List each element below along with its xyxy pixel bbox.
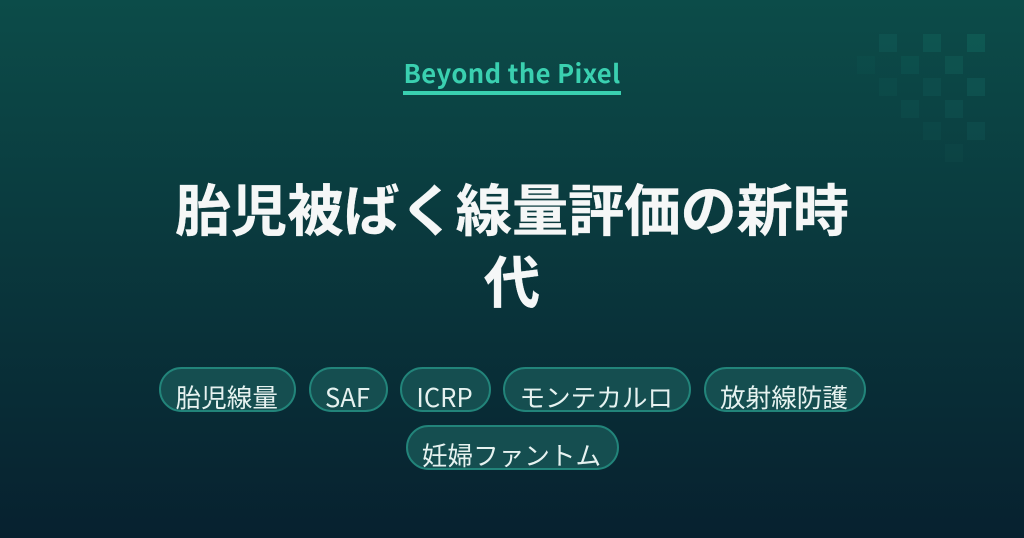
title xyxy=(175,167,849,320)
decorative pixel grid xyxy=(879,34,985,96)
tag: 放射線防護: 放射線防護 xyxy=(720,378,848,415)
tag: SAF: SAF xyxy=(325,378,370,415)
tag: モンテカルロ: モンテカルロ xyxy=(519,378,673,415)
tag: ICRP: ICRP xyxy=(416,378,473,415)
tag: モンテカルロ xyxy=(503,367,691,412)
tag: SAF xyxy=(309,367,388,412)
tag: 放射線防護 xyxy=(704,367,866,412)
tag: 妊婦ファントム xyxy=(406,425,619,470)
tag: 胎児線量: 胎児線量 xyxy=(176,378,278,415)
tag: 妊婦ファントム: 妊婦ファントム xyxy=(422,436,601,473)
tag: ICRP xyxy=(400,367,490,412)
title: 代 xyxy=(484,239,540,320)
title: 胎児被ばく線量評価の新時 xyxy=(175,167,849,248)
tag: 胎児線量 xyxy=(159,367,296,412)
keyword tags xyxy=(159,367,866,473)
brand label: Beyond the Pixel: Beyond the Pixel xyxy=(403,54,621,91)
